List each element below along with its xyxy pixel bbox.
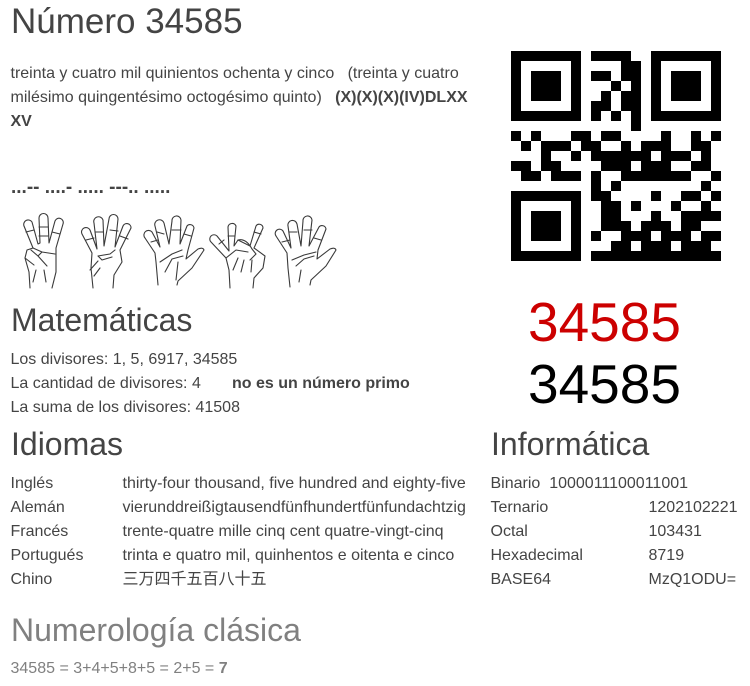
heading: Informática: Informática [491, 426, 649, 462]
table: languages: trente-quatre mille cinq cent quatre-vingt-cinq [122, 523, 444, 540]
table: computing: Hexadecimal [490, 547, 583, 564]
table: languages: Francés [10, 523, 68, 540]
text block: divisors: La cantidad de divisores: 4 [10, 375, 201, 392]
table: languages: thirty-four thousand, five hundred and eighty-five [122, 475, 466, 492]
text block: number in words: XV [10, 113, 32, 130]
heading: Numerología clásica: Numerología clásica [11, 612, 301, 648]
red number: 34585 [528, 291, 681, 353]
table: computing: 8719 [648, 547, 684, 564]
table: computing [490, 475, 737, 588]
text block: divisors: no es un número primo [232, 375, 410, 392]
table: languages [10, 475, 466, 588]
table: languages: Chino [10, 571, 52, 588]
table: computing: BASE64 [490, 571, 551, 588]
table: languages: 三万四千五百八十五 [122, 571, 267, 588]
table: languages: Inglés [10, 475, 53, 492]
hand 5 [144, 216, 204, 285]
text block: number in words: milésimo quingentésimo octogésimo quinto) (X)(X)(X)(IV)DLXX [10, 89, 468, 106]
hand 7 [275, 216, 336, 287]
table: computing: MzQ1ODU= [648, 571, 736, 588]
heading: Matemáticas: Matemáticas [11, 302, 192, 338]
hand 3 [24, 214, 63, 288]
text block: divisors: Los divisores: 1, 5, 6917, 34585 [10, 351, 237, 368]
hand 6 [210, 223, 265, 288]
morse code: ...-- ....- ..... ---.. ..... [11, 177, 170, 198]
hand 4 [82, 214, 131, 288]
text block: divisors [10, 351, 410, 416]
table: computing: 1202102221 [648, 499, 737, 516]
table: languages: Alemán [10, 499, 65, 516]
table: computing: 103431 [648, 523, 702, 540]
text block: number in words: treinta y cuatro mil quinientos ochenta y cinco (treinta y cuatro [10, 65, 459, 82]
text block: numerology: 34585 = 3+4+5+8+5 = 2+5 = 7 [10, 660, 228, 677]
table: computing: Binario 1000011100011001 [490, 475, 688, 492]
title: Número 34585 [11, 2, 243, 41]
table: languages: Portugués [10, 547, 83, 564]
table: languages: trinta e quatro mil, quinhentos e oitenta e cinco [122, 547, 454, 564]
text block: number in words [10, 65, 468, 130]
table: computing: Octal [490, 523, 528, 540]
table: computing: Ternario [490, 499, 548, 516]
text block: divisors: La suma de los divisores: 41508 [10, 399, 240, 416]
table: languages: vierunddreißigtausendfünfhundertfünfundachtzig [122, 499, 466, 516]
heading: Idiomas: Idiomas [11, 426, 123, 462]
black number: 34585 [528, 353, 681, 415]
